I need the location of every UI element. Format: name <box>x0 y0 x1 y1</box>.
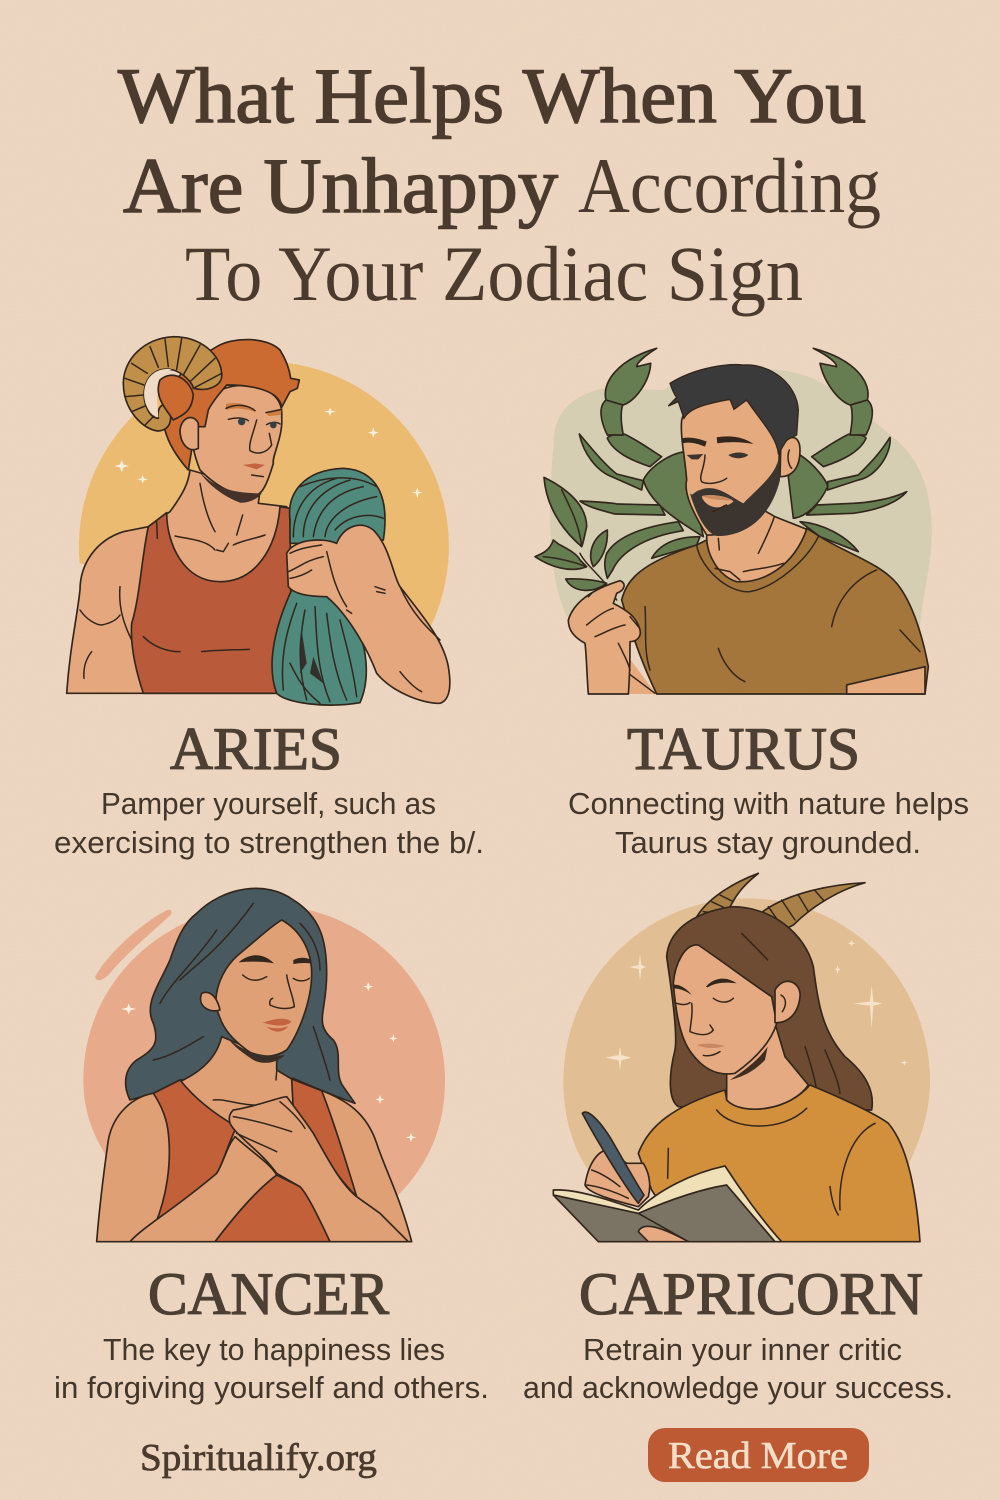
heading: CAPRICORN: CAPRICORN <box>579 1261 923 1327</box>
advice text: capricorn: and acknowledge your success. <box>523 1370 953 1405</box>
advice text: taurus: Connecting with nature helps <box>568 786 969 821</box>
button: read more <box>648 1428 869 1482</box>
advice text: aries <box>54 786 484 860</box>
advice text: cancer: The key to happiness lies <box>103 1332 445 1367</box>
heading: CANCER: CANCER <box>148 1261 389 1327</box>
advice text: cancer: in forgiving yourself and others. <box>54 1370 489 1405</box>
panel: capricorn <box>523 873 953 1405</box>
advice text: taurus <box>568 786 969 860</box>
button: read more: Read More <box>668 1435 848 1477</box>
panel: aries <box>54 337 484 860</box>
advice text: aries: exercising to strengthen the b/. <box>54 825 484 860</box>
title: To Your Zodiac Sign <box>185 230 803 317</box>
panel: cancer <box>54 888 489 1405</box>
panel: taurus <box>535 348 969 860</box>
heading: TAURUS: TAURUS <box>627 716 860 782</box>
footer: site name: Spiritualify.org <box>140 1437 377 1479</box>
illustration: taurus man with crab and plant <box>535 348 932 694</box>
advice text: capricorn: Retrain your inner critic <box>583 1332 902 1367</box>
heading: ARIES: ARIES <box>170 716 342 782</box>
illustration: capricorn woman with horns writing in a journal <box>553 873 930 1242</box>
advice text: cancer <box>54 1332 489 1405</box>
title: According <box>578 142 881 229</box>
title: Are Unhappy <box>123 142 558 229</box>
illustration: aries man with ram horns and rope <box>67 337 450 705</box>
advice text: capricorn <box>523 1332 953 1405</box>
illustration: cancer woman with hands on heart <box>83 888 445 1242</box>
title: What Helps When You <box>118 52 866 139</box>
advice text: aries: Pamper yourself, such as <box>101 786 436 821</box>
advice text: taurus: Taurus stay grounded. <box>615 825 921 860</box>
title <box>118 52 881 317</box>
